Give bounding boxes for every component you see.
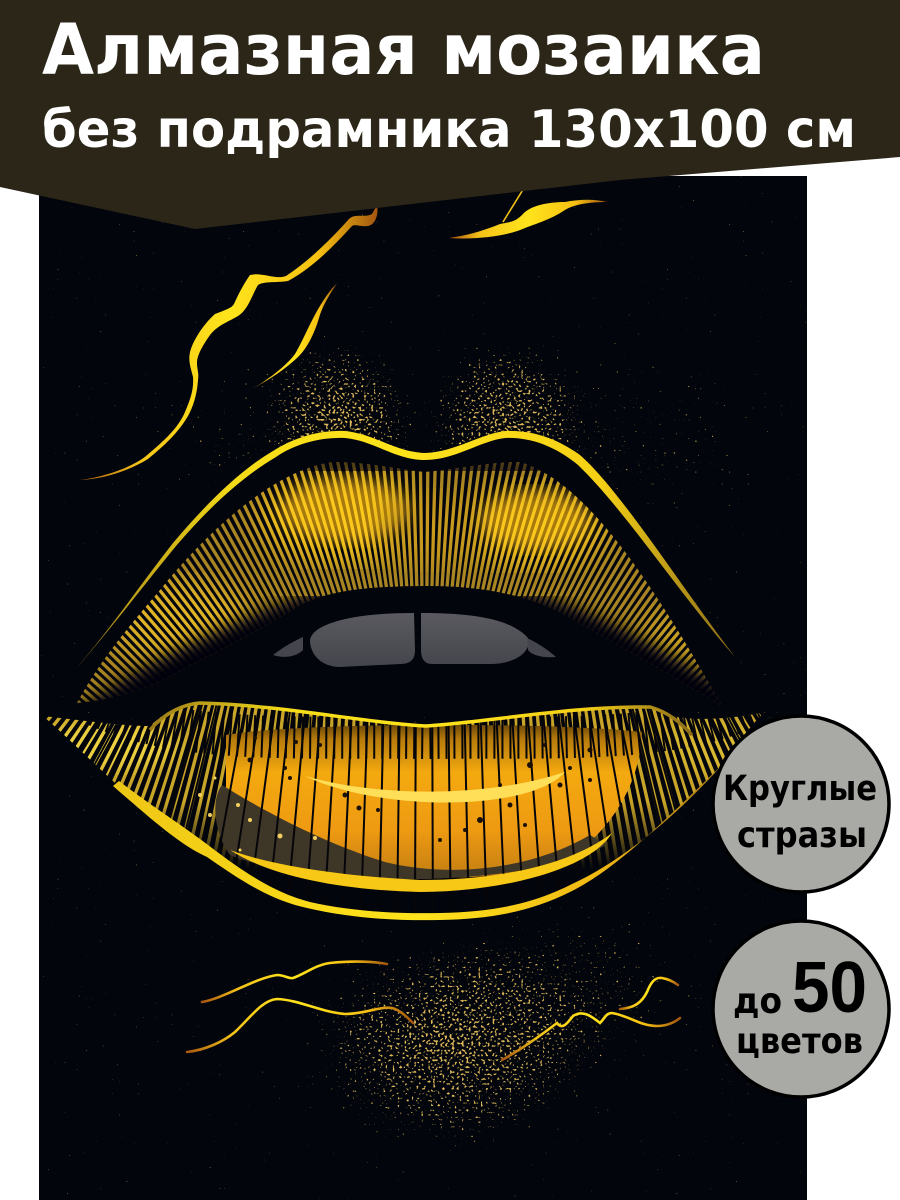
subtitle: без подрамника 130х100 см: [42, 100, 856, 160]
dark speckles: [248, 736, 592, 842]
badge: up to 50 colours: цветов: [736, 1021, 863, 1062]
lower lip top edge: [150, 703, 692, 735]
title: Алмазная мозаика: [42, 9, 765, 91]
gold speckles: [198, 776, 317, 852]
crack: long left: [80, 205, 378, 480]
gold cracks top: [80, 188, 607, 480]
lower lip highlight: [305, 772, 565, 803]
badge: round rhinestones: [713, 716, 889, 892]
teeth: [273, 613, 556, 667]
badge: round rhinestones: Круглые: [723, 769, 877, 809]
lower lip orange body: [226, 725, 642, 878]
badge: up to 50 colours: до: [733, 981, 782, 1022]
badge: round rhinestones: стразы: [737, 815, 867, 856]
gold dust: [130, 325, 780, 1160]
lower lip: [46, 701, 765, 920]
gold cracks bottom: [187, 962, 680, 1060]
crack: short left: [250, 283, 337, 390]
lower lip outline: [113, 765, 722, 920]
upper lip outline: [68, 431, 735, 678]
crack: top right: [449, 200, 607, 238]
badge: up to 50 colours: 50: [792, 948, 867, 1028]
upper lip: [77, 430, 734, 705]
lower lip inner crescent: [230, 833, 612, 892]
artwork panel: [39, 176, 807, 1200]
badge: up to 50 colours: [713, 921, 889, 1097]
lower lip grey band: [215, 785, 606, 879]
lips: [46, 430, 765, 920]
header banner: [0, 0, 900, 229]
